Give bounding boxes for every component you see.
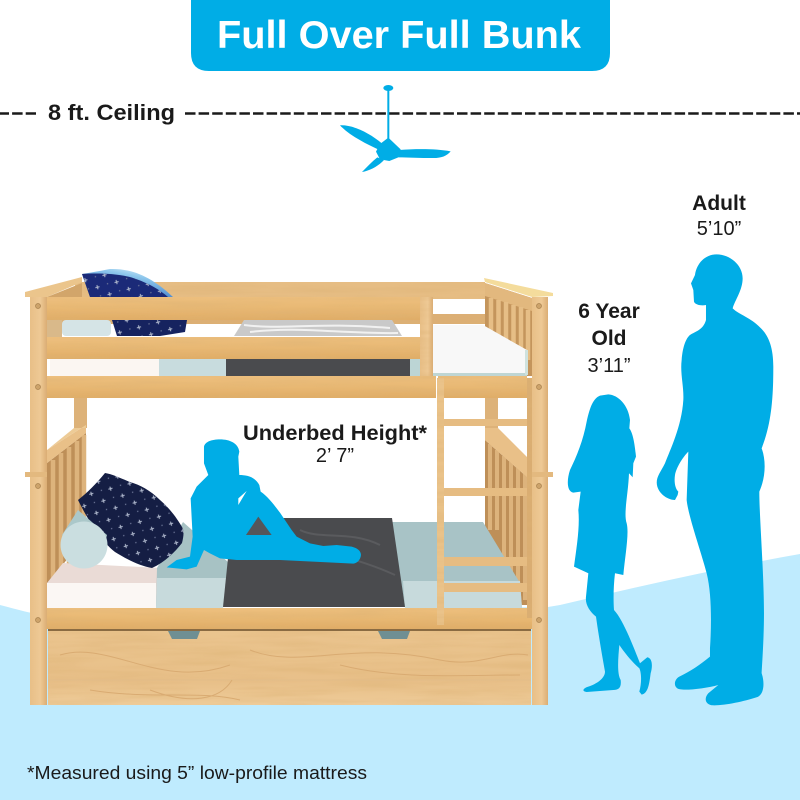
label: adult: Adult bbox=[692, 192, 746, 215]
upper guard rails bbox=[47, 297, 527, 398]
trundle drawer bbox=[48, 629, 531, 705]
posts bbox=[25, 297, 553, 705]
silhouette: seated person bbox=[167, 439, 361, 569]
bunk bed bbox=[25, 269, 553, 705]
right top cap bbox=[484, 278, 553, 297]
label: six year old bbox=[578, 300, 640, 377]
lower right headboard bbox=[485, 428, 527, 605]
ladder bbox=[444, 419, 527, 592]
label: adult: 5’10” bbox=[697, 218, 741, 240]
label: six year old: 3’11” bbox=[588, 355, 630, 377]
label: adult bbox=[692, 192, 746, 240]
title banner: Full Over Full Bunk bbox=[217, 14, 581, 57]
title banner bbox=[191, 0, 610, 71]
label: underbed height: Underbed Height* bbox=[243, 421, 428, 445]
lower pillow and bolster bbox=[60, 473, 184, 568]
ceiling line label: 8 ft. Ceiling bbox=[48, 100, 175, 125]
floor background bbox=[0, 554, 800, 800]
lower rail bbox=[47, 378, 535, 629]
label: underbed height bbox=[243, 421, 428, 467]
upper right slatted panel bbox=[485, 283, 532, 376]
label: underbed height: 2’ 7” bbox=[316, 445, 354, 467]
lower left headboard bbox=[47, 425, 86, 585]
upper pillow and bolster bbox=[62, 269, 187, 336]
label: six year old: Old bbox=[592, 327, 626, 350]
silhouette: child bbox=[568, 394, 652, 695]
upper back rails bbox=[47, 282, 485, 337]
left post and top cap bbox=[25, 277, 498, 430]
icon: ceiling fan bbox=[340, 85, 451, 172]
footnote: *Measured using 5” low-profile mattress bbox=[27, 762, 367, 783]
lower mattress bbox=[47, 518, 522, 608]
upper mattress bbox=[47, 320, 528, 376]
label: six year old: 6 Year bbox=[578, 300, 640, 323]
silhouette: adult bbox=[657, 254, 773, 705]
